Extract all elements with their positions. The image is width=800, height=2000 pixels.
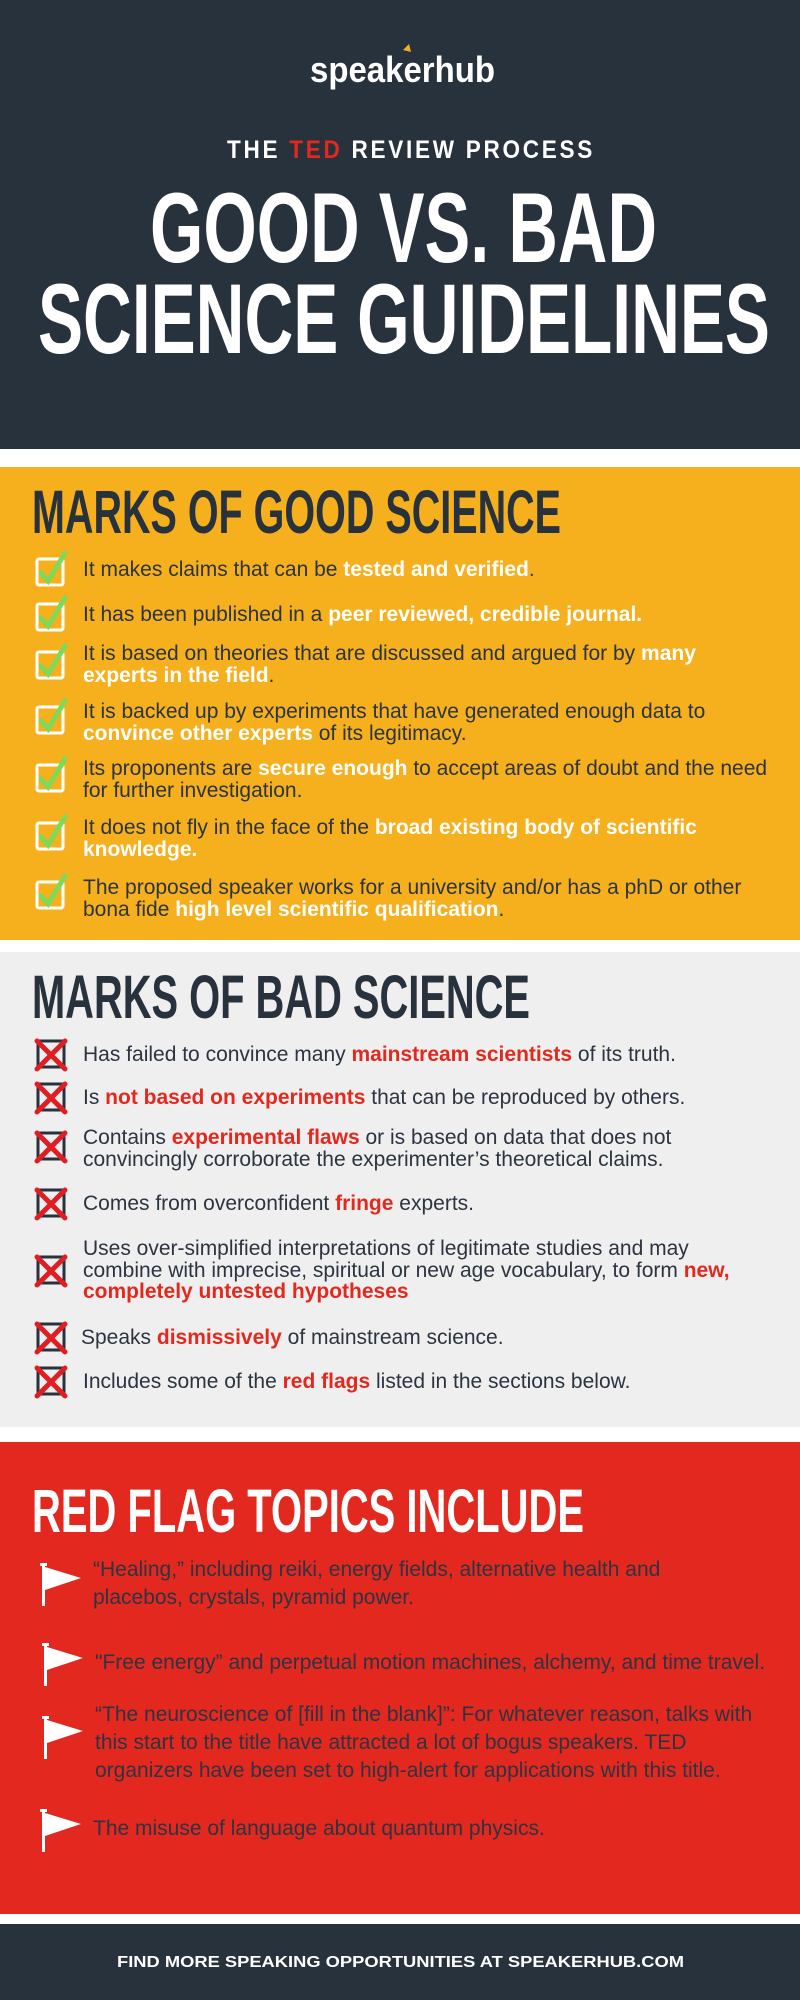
panel: bad science bbox=[0, 952, 800, 1427]
good items: It is based on theories that are discussed and argued for by many experts in the field. bbox=[83, 642, 696, 686]
bad items: Contains experimental flaws or is based on data that does not convincingly corroborate the experimenter’s theoretical claims. bbox=[83, 1126, 671, 1170]
bad items: Comes from overconfident fringe experts. bbox=[83, 1192, 474, 1215]
footer text: FIND MORE SPEAKING OPPORTUNITIES AT SPEAKERHUB.COM bbox=[117, 1954, 684, 1971]
bad items: Speaks dismissively of mainstream science. bbox=[81, 1326, 504, 1349]
bad items bbox=[34, 1038, 730, 1398]
bad items: Includes some of the red flags listed in the sections below. bbox=[83, 1370, 630, 1393]
title bbox=[38, 172, 770, 370]
good items: The proposed speaker works for a university and/or has a phD or other bona fide high level scientific qualification. bbox=[83, 876, 741, 920]
good items: It is backed up by experiments that have generated enough data to convince other experts of its legitimacy. bbox=[83, 700, 705, 744]
flag items: “The neuroscience of [fill in the blank]”: For whatever reason, talks with this start to the title have attracted a lot of bogus speakers. TED organizers have been set to high-alert for applications with this title. bbox=[95, 1703, 752, 1782]
flag items: “Healing,” including reiki, energy fields, alternative health and placebos, crystals, pyramid power. bbox=[93, 1558, 660, 1609]
subtitle: THE TED REVIEW PROCESS bbox=[227, 136, 595, 164]
good items: It does not fly in the face of the broad existing body of scientific knowledge. bbox=[83, 816, 697, 860]
good items: It makes claims that can be tested and verified. bbox=[83, 558, 535, 581]
good items: Its proponents are secure enough to accept areas of doubt and the need for further investigation. bbox=[83, 757, 767, 802]
flag items: "Free energy” and perpetual motion machines, alchemy, and time travel. bbox=[95, 1651, 765, 1674]
good items bbox=[36, 550, 767, 920]
bad items: Has failed to convince many mainstream scientists of its truth. bbox=[83, 1043, 676, 1066]
bad items: Uses over-simplified interpretations of legitimate studies and may combine with imprecise, spiritual or new age vocabulary, to form new, completely untested hypotheses bbox=[83, 1237, 730, 1303]
heading: marks of bad science: MARKS OF BAD SCIENCE bbox=[32, 963, 530, 1031]
header bbox=[0, 0, 800, 449]
flag items: The misuse of language about quantum physics. bbox=[93, 1817, 545, 1840]
good items: It has been published in a peer reviewed, credible journal. bbox=[83, 603, 642, 626]
panel: good science bbox=[0, 467, 800, 940]
bad items: Is not based on experiments that can be reproduced by others. bbox=[83, 1086, 685, 1109]
footer bbox=[0, 1924, 800, 2000]
flag items bbox=[40, 1558, 765, 1852]
panel: red flag topics bbox=[0, 1442, 800, 1914]
logo: speakerhub bbox=[310, 49, 495, 90]
